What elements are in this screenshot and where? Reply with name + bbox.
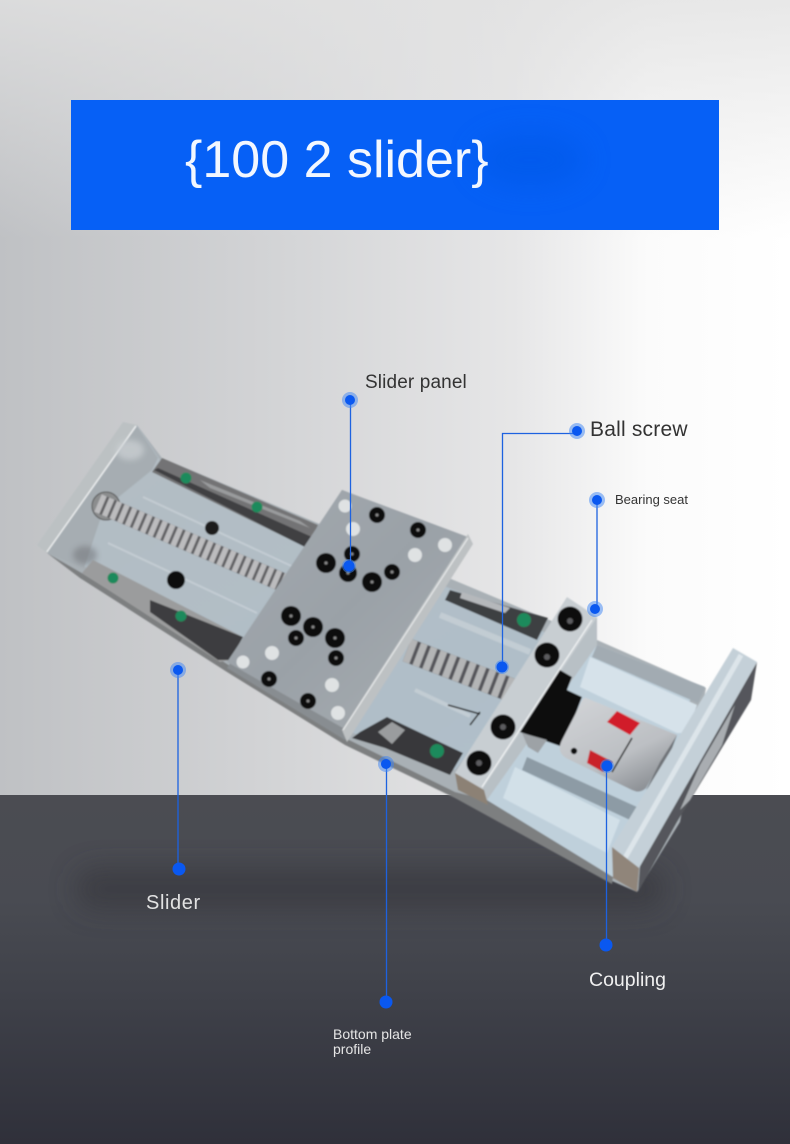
ball screw: right section <box>407 650 511 690</box>
rail: right lower <box>352 717 463 775</box>
right end plate <box>612 648 757 892</box>
left channel highlights <box>108 497 530 716</box>
rail bolts and marks <box>167 521 480 725</box>
bearing block <box>520 670 582 753</box>
background: dark floor <box>0 795 790 1144</box>
label: Bottom plate profile: Bottom plate <box>333 1026 412 1042</box>
title banner <box>71 100 719 230</box>
plate counterbored bolts <box>261 507 426 709</box>
label: Bearing seat: Bearing seat <box>615 492 688 507</box>
marker: centre dots <box>172 395 612 1008</box>
label: Bottom plate profile <box>333 1026 412 1057</box>
rail: lower <box>82 560 243 662</box>
label: Slider: Slider <box>146 892 201 914</box>
marker: halo circles <box>170 392 614 773</box>
background: light backdrop <box>0 0 790 796</box>
leader lines and markers <box>170 392 614 1008</box>
rail: upper <box>152 458 318 548</box>
plate light holes <box>236 500 452 720</box>
rail: right upper <box>445 590 548 640</box>
left end plate <box>37 422 158 568</box>
plate bolt centres <box>268 514 420 702</box>
label: Bottom plate profile: profile <box>333 1041 371 1057</box>
label: Ball screw: Ball screw <box>590 418 688 441</box>
ball screw: left section <box>92 492 284 583</box>
title text: {100 2 slider} <box>185 131 489 189</box>
label: Coupling: Coupling <box>589 969 666 991</box>
label: Slider panel: Slider panel <box>365 372 467 393</box>
slider plate <box>227 490 473 742</box>
coupling <box>560 698 677 792</box>
bearing seat <box>455 597 597 805</box>
base profile body <box>47 425 706 892</box>
seat bolts <box>466 606 582 776</box>
green rail dots <box>108 472 531 758</box>
product: ball screw linear slide <box>37 422 757 892</box>
right channel <box>487 645 705 877</box>
